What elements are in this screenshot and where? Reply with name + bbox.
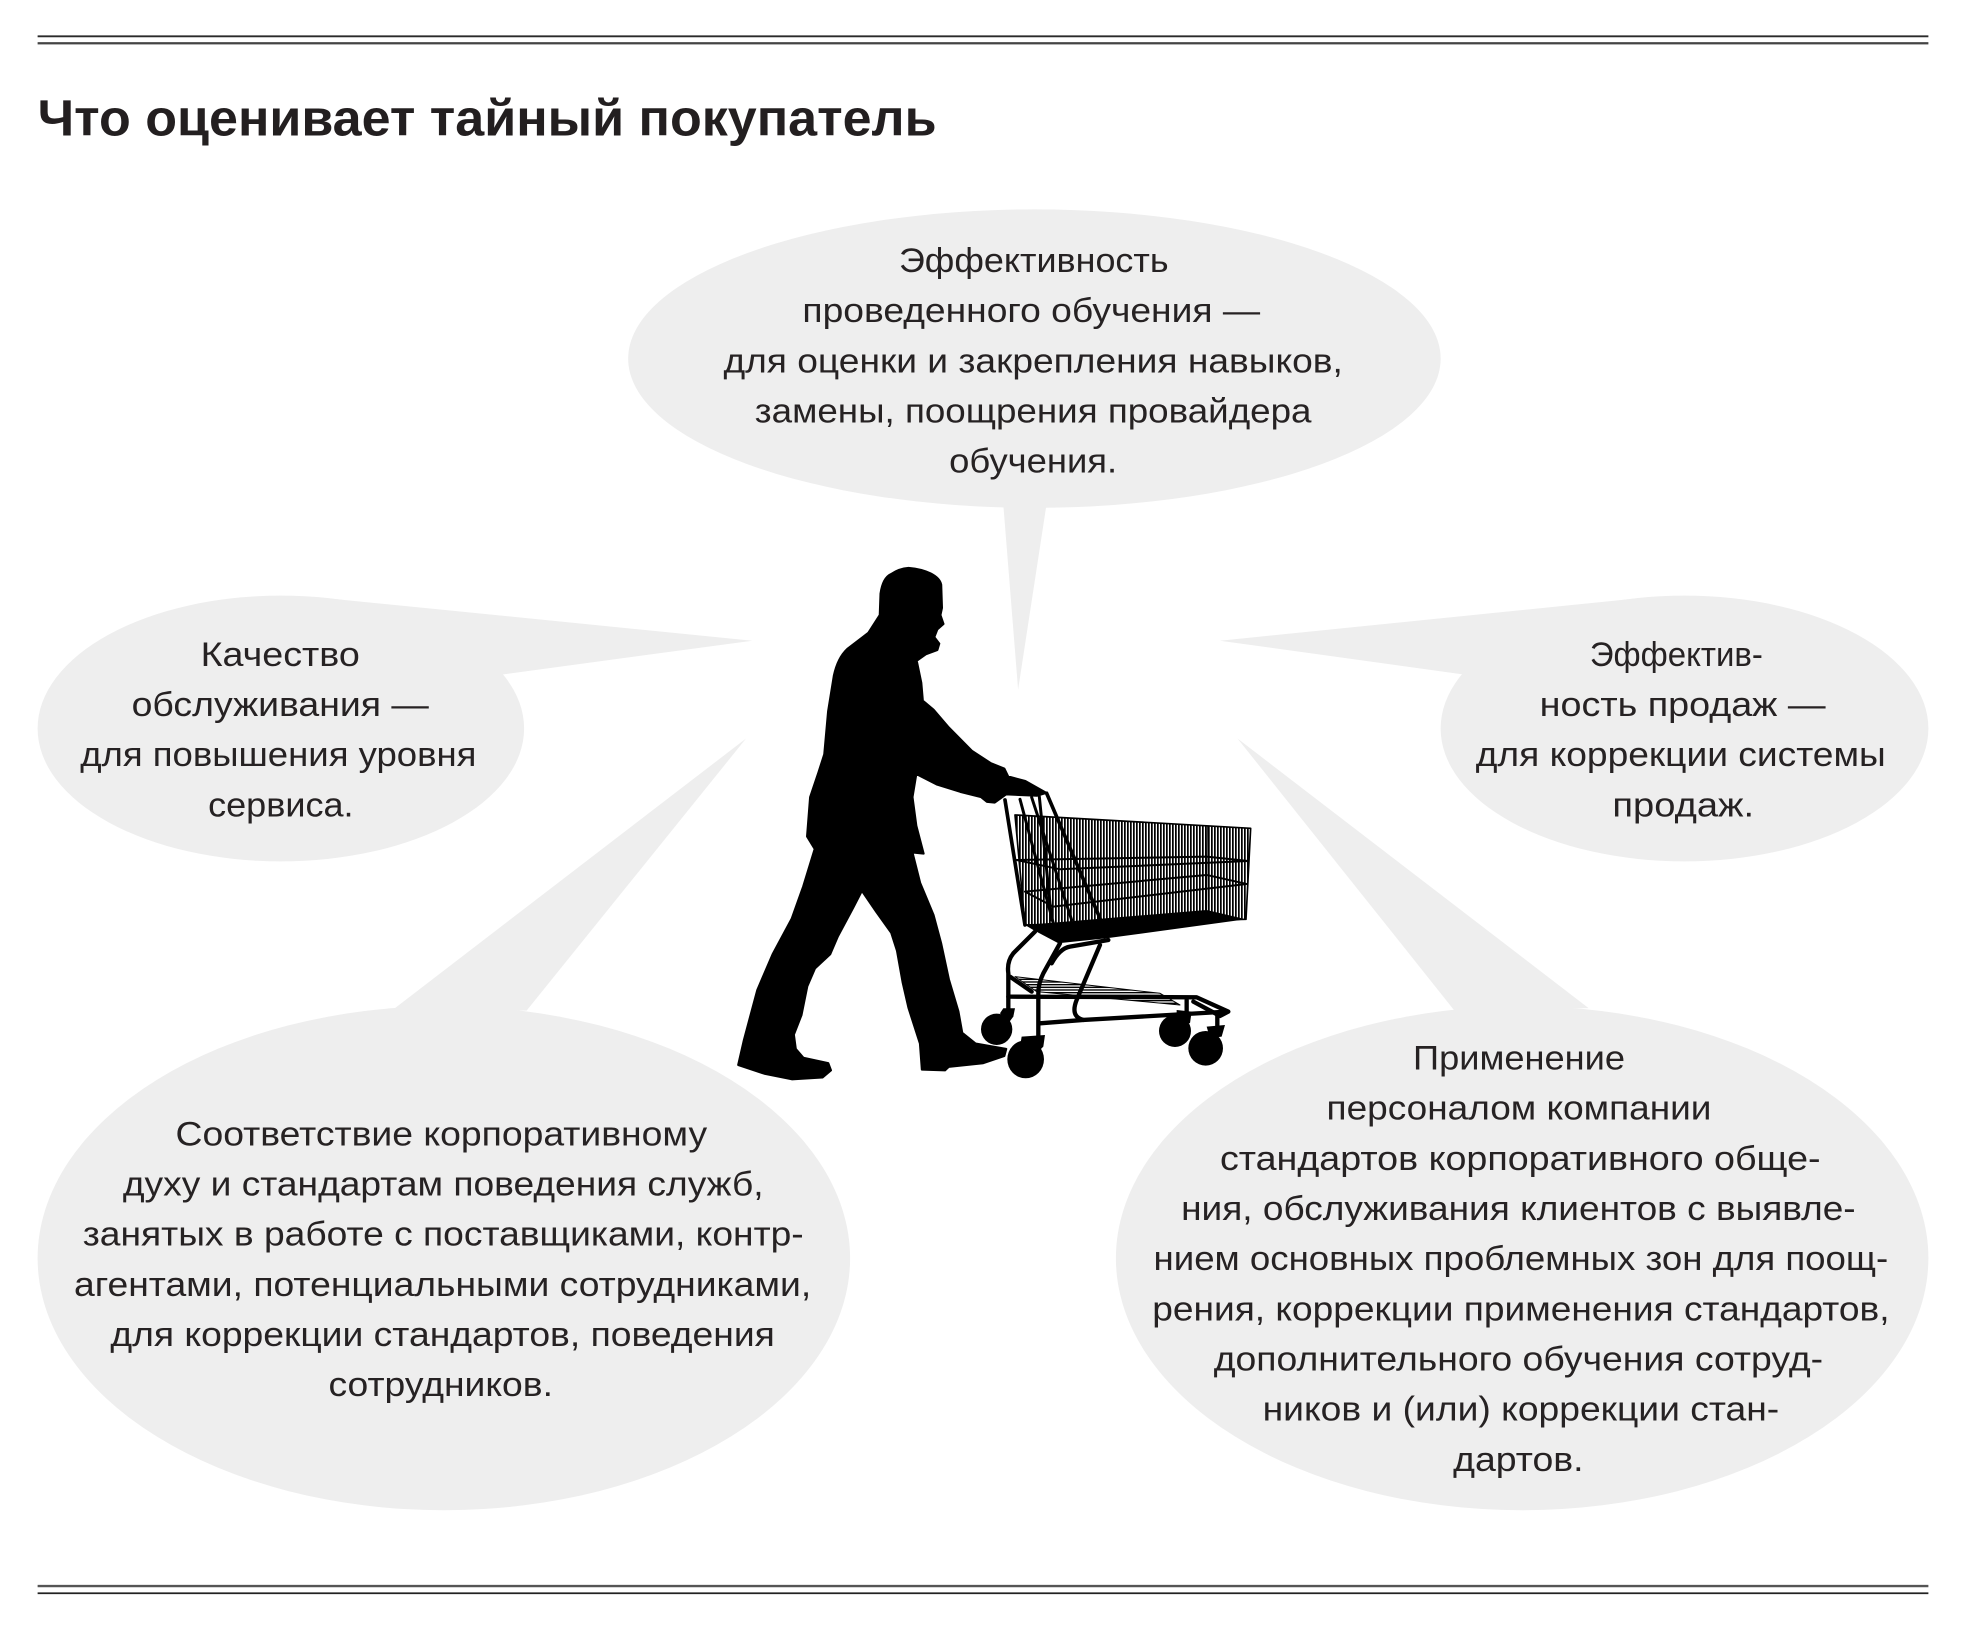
text: service quality [80, 636, 476, 824]
panel: sales effectiveness [1220, 596, 1928, 861]
cart handle [1005, 793, 1100, 925]
panel: service quality [38, 596, 752, 861]
panel: training effectiveness [628, 209, 1441, 690]
title: Что оценивает тайный покупатель [38, 88, 937, 146]
text: sales effectiveness: продаж. [1612, 786, 1754, 824]
text: corporate spirit: занятых в работе с поставщиками, контр- [83, 1216, 804, 1254]
text: training effectiveness: Эффективность [899, 242, 1169, 280]
text: corporate spirit: агентами, потенциальными сотрудниками, [74, 1266, 811, 1304]
cart frame [1008, 932, 1228, 1037]
text: staff standards: ников и (или) коррекции стан- [1263, 1391, 1779, 1429]
speech bubble: corporate spirit [38, 739, 850, 1510]
panel: corporate spirit [38, 739, 850, 1510]
text: sales effectiveness: Эффектив- [1590, 636, 1763, 674]
text: staff standards: ния, обслуживания клиентов с выявле- [1181, 1190, 1856, 1228]
text: sales effectiveness [1476, 636, 1886, 824]
text: sales effectiveness: ность продаж — [1540, 686, 1826, 724]
text: sales effectiveness: для коррекции системы [1476, 736, 1886, 774]
text: corporate spirit: Соответствие корпоративному [176, 1115, 708, 1153]
text: staff standards: Применение [1413, 1040, 1625, 1078]
text: staff standards: рения, коррекции применения стандартов, [1152, 1290, 1890, 1328]
speech bubble: staff standards [1116, 739, 1928, 1510]
text: staff standards: нием основных проблемных зон для поощ- [1154, 1240, 1888, 1278]
text: service quality: для повышения уровня [80, 736, 476, 774]
text: corporate spirit [74, 1115, 811, 1404]
text: staff standards: персоналом компании [1327, 1090, 1711, 1128]
icon: shopping cart [1005, 793, 1251, 1037]
text: training effectiveness [723, 242, 1343, 481]
text: service quality: сервиса. [208, 786, 354, 824]
text: corporate spirit: духу и стандартам поведения служб, [123, 1166, 764, 1204]
text: staff standards: дартов. [1453, 1441, 1584, 1479]
text: staff standards [1152, 1040, 1890, 1479]
text: training effectiveness: обучения. [949, 443, 1117, 481]
cart wheels [981, 1008, 1225, 1078]
speech bubble: service quality [38, 596, 752, 861]
cart rack [1015, 977, 1180, 1005]
text: service quality: обслуживания — [132, 686, 429, 724]
text: corporate spirit: для коррекции стандартов, поведения [110, 1316, 775, 1354]
cart basket [1015, 815, 1251, 943]
icon: man silhouette [738, 568, 1046, 1079]
text: training effectiveness: проведенного обучения — [802, 292, 1261, 330]
speech bubble: training effectiveness [628, 209, 1441, 690]
text: service quality: Качество [201, 636, 360, 674]
icon: shopper with cart [738, 568, 1251, 1079]
text: corporate spirit: сотрудников. [329, 1366, 553, 1404]
speech bubble: sales effectiveness [1220, 596, 1928, 861]
text: training effectiveness: замены, поощрения провайдера [755, 393, 1312, 431]
text: staff standards: дополнительного обучения сотруд- [1214, 1340, 1823, 1378]
text: training effectiveness: для оценки и закрепления навыков, [723, 342, 1343, 380]
text: staff standards: стандартов корпоративного обще- [1220, 1140, 1821, 1178]
panel: staff standards [1116, 739, 1928, 1510]
